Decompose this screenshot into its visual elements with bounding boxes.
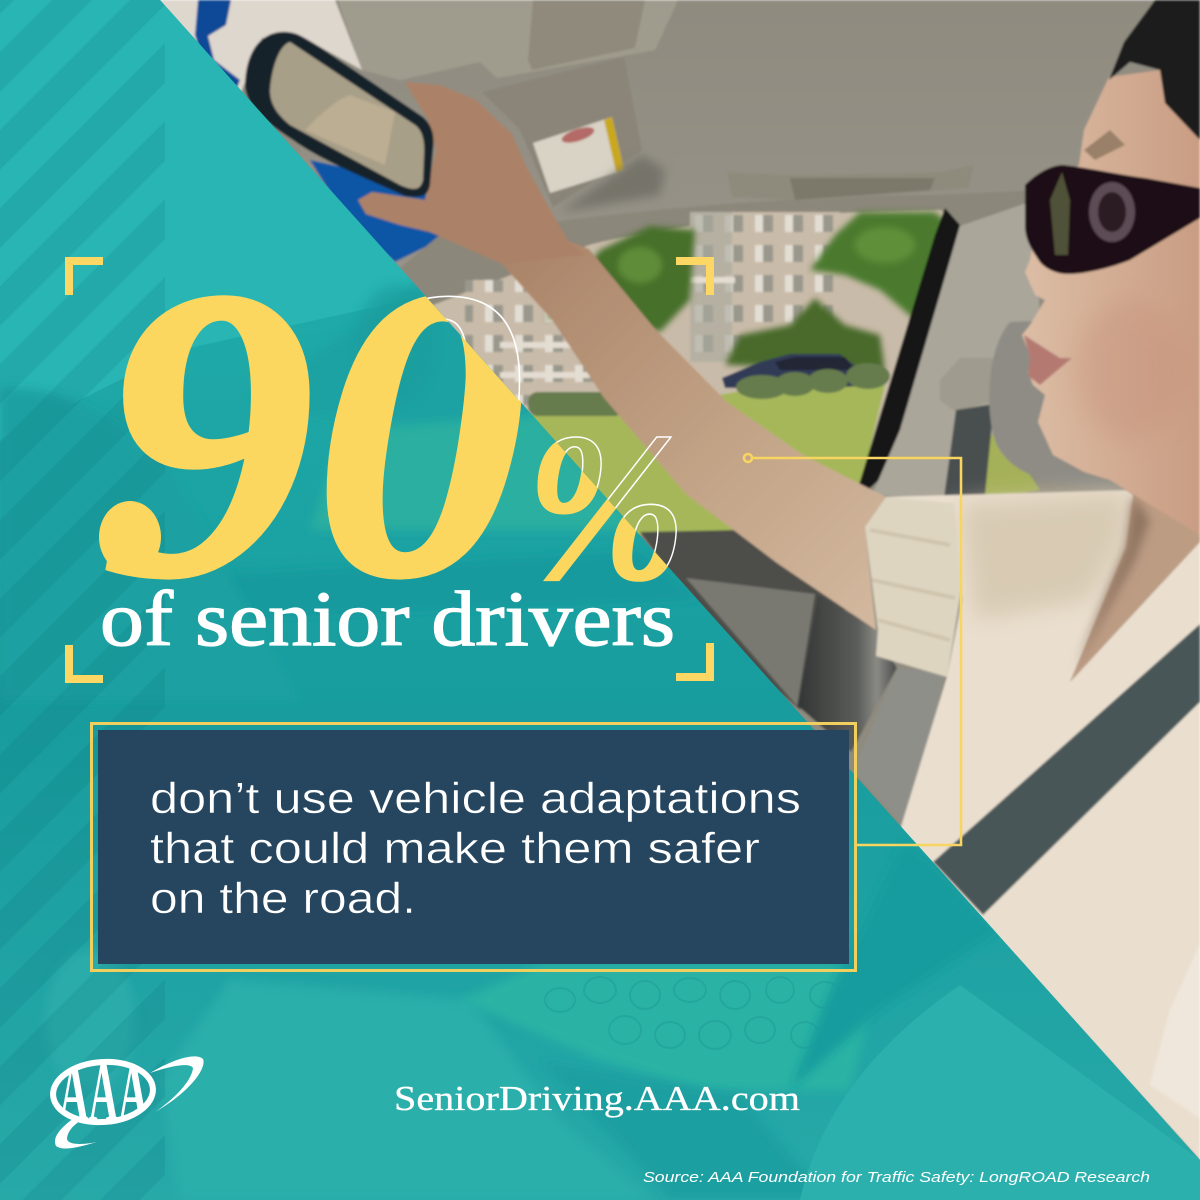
photo: shirt — [880, 490, 1200, 1160]
ghost: tree in window — [364, 286, 404, 310]
ghost: dashboard edge — [540, 563, 643, 568]
logo: AAA — [50, 1056, 204, 1148]
photo: sun visor — [482, 57, 642, 207]
photo: cheek — [1075, 300, 1185, 440]
photo: overhead console — [338, 0, 678, 80]
bracket: top left — [65, 257, 103, 295]
callout text: don’t use vehicle adaptations — [150, 774, 801, 823]
photo: side window — [420, 210, 958, 540]
photo: seat — [854, 668, 945, 830]
90 filled: % — [526, 389, 686, 624]
photo: door panel — [640, 530, 850, 710]
photo: sky behind windshield — [130, 0, 362, 120]
statistic: 90 percent — [99, 295, 677, 582]
photo: mirror mount — [195, 0, 240, 100]
bracket: bottom left — [65, 645, 103, 683]
photo: blue windshield edge — [310, 160, 470, 262]
photo: console lid — [528, 0, 645, 70]
photo: visor shadow — [560, 155, 665, 212]
subheading: of senior drivers — [100, 575, 675, 662]
90 outline: % — [526, 389, 686, 624]
90 filled: 90 — [102, 202, 527, 663]
photo: raised arm — [502, 241, 886, 630]
ghost: belt shadow — [790, 840, 1000, 1090]
ghost: side window — [310, 415, 640, 530]
ghost: headliner shadow — [408, 284, 534, 416]
connector line with dot — [744, 454, 961, 845]
photo: headliner — [300, 0, 1200, 300]
photo: outside grass by headrest — [985, 430, 1040, 500]
photo: shoulder belt — [933, 624, 1200, 915]
logo: AAA: AAA — [59, 1044, 148, 1140]
bracket: top right — [676, 257, 714, 295]
90 outline: 90 — [102, 202, 527, 663]
callout text: on the road. — [150, 874, 416, 923]
ghost: wheel — [48, 952, 132, 1070]
source note: Source: AAA Foundation for Traffic Safety: LongROAD Research — [643, 1169, 1150, 1186]
ghost: console dark — [560, 1068, 805, 1198]
photo: face — [1022, 70, 1200, 535]
photo: rear-view mirror — [245, 32, 434, 197]
bracket: bottom right — [676, 643, 714, 681]
photo: parked car — [722, 354, 858, 388]
diagonal stripe band — [0, 0, 165, 1200]
callout text: that could make them safer — [150, 824, 760, 873]
callout text — [150, 774, 801, 923]
callout box — [92, 724, 856, 970]
corner brackets — [65, 257, 714, 683]
photo: lower sleeve — [1150, 944, 1200, 1118]
photo: mouth — [1024, 335, 1072, 385]
ghost: lap highlight — [167, 984, 552, 1124]
photo: hair — [1109, 0, 1200, 140]
photo: knit sleeve — [865, 497, 962, 677]
90 outline — [426, 296, 677, 566]
ghost: windshield light area — [0, 0, 426, 400]
photo: hand — [358, 82, 585, 264]
photo: shirt shoulder shading — [960, 492, 1130, 620]
photo: headrest — [989, 320, 1124, 488]
website url: SeniorDriving.AAA.com — [394, 1079, 800, 1118]
photo: upper door trim — [400, 190, 1040, 330]
photo: door frame — [798, 595, 897, 752]
photo: upper seatbelt — [943, 404, 994, 505]
photo: b-pillar — [872, 200, 1040, 500]
photo: black pillar edge — [858, 208, 960, 490]
ghost: torso highlight — [800, 985, 1200, 1200]
photo: neck and chest — [1070, 480, 1200, 682]
photo: grab handle — [727, 165, 974, 201]
90 filled — [99, 295, 668, 582]
photo: hedges — [528, 363, 890, 416]
photo: eyebrow — [1084, 130, 1125, 160]
photo: seatbelt anchor — [940, 358, 997, 412]
ghost: bag — [460, 965, 880, 1090]
ghost: left steering area — [0, 388, 251, 623]
photo: grass — [420, 385, 885, 535]
photo: sunglasses — [1025, 165, 1200, 274]
photo: trees — [545, 212, 950, 370]
photo: visor sticker — [533, 117, 624, 193]
photo: apartment building — [465, 212, 840, 405]
